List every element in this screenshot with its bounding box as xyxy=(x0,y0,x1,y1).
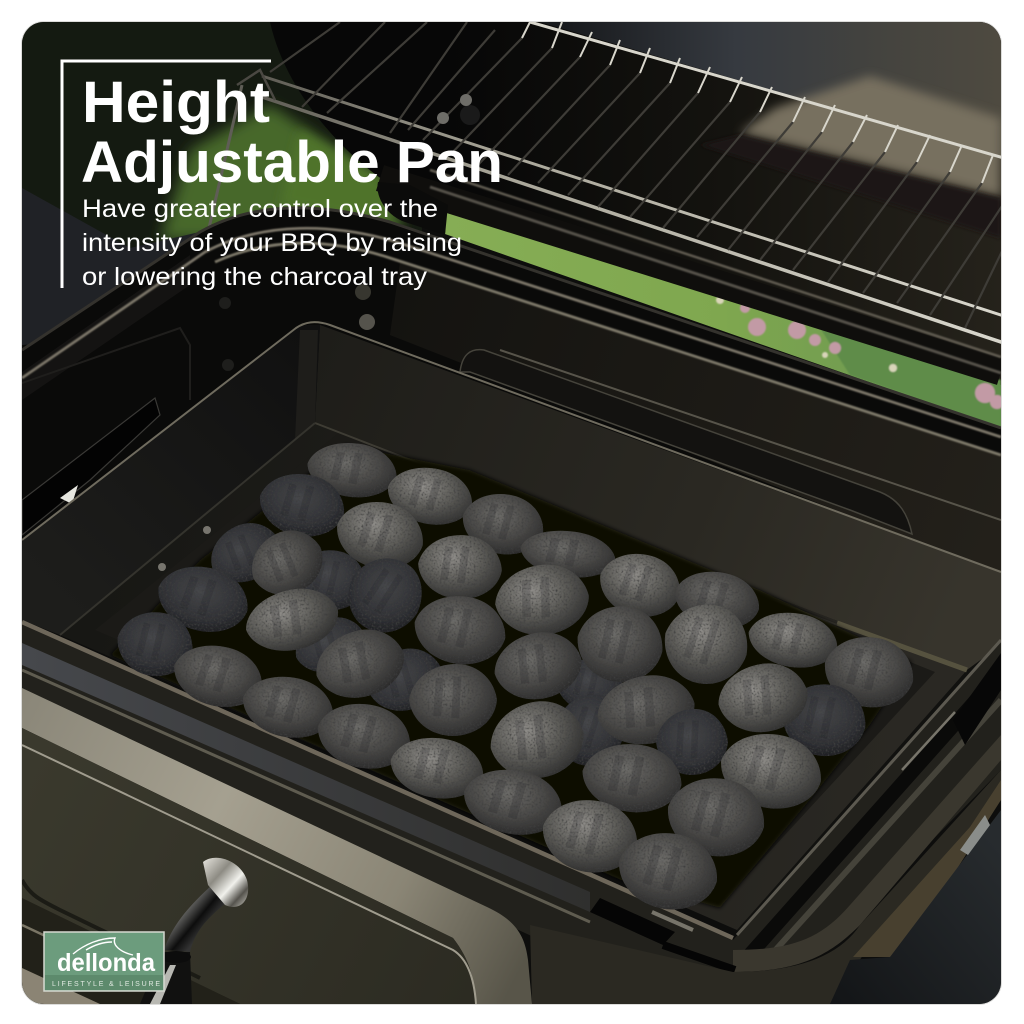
briquette shadow xyxy=(110,445,912,908)
description xyxy=(82,195,462,291)
charcoal briquettes xyxy=(112,437,920,919)
lid hinge tubes xyxy=(380,170,1001,373)
slot handle on back wall xyxy=(460,350,912,534)
grill body front xyxy=(22,620,1001,972)
vent knob xyxy=(140,858,248,1004)
brand logo: LIFESTYLE & LEISURE xyxy=(52,981,160,988)
lid bolts xyxy=(437,94,480,125)
lawn and flowers xyxy=(445,200,1004,428)
lower body and ground xyxy=(22,770,1001,1004)
right rim tubes xyxy=(737,640,1001,935)
brand logo xyxy=(44,932,164,991)
charcoal pan xyxy=(22,322,1001,950)
description: intensity of your BBQ by raising xyxy=(82,229,462,257)
pan floor xyxy=(60,423,967,930)
right slot xyxy=(958,653,1001,745)
lit lid top xyxy=(740,76,1001,197)
bright front band xyxy=(22,688,532,1004)
description: or lowering the charcoal tray xyxy=(82,263,428,291)
front panel xyxy=(22,728,476,1004)
hopper rear wall xyxy=(34,209,422,344)
lid interior xyxy=(270,22,1001,390)
description: Have greater control over the xyxy=(82,195,438,223)
pan walls xyxy=(315,325,1001,670)
scene behind the grate xyxy=(540,22,1001,157)
heading frame xyxy=(62,61,271,288)
back rim tubes xyxy=(22,208,1001,520)
title xyxy=(81,70,503,195)
side vent handle xyxy=(22,398,160,535)
hinge pillar xyxy=(377,182,448,235)
front lip tube xyxy=(22,622,733,938)
garden background xyxy=(22,22,422,345)
blue grey band xyxy=(22,643,590,912)
bolts on hopper xyxy=(219,284,375,371)
title: Adjustable Pan xyxy=(81,130,503,195)
pan catch xyxy=(590,898,675,945)
cooking grate xyxy=(197,22,1004,343)
pan rim highlights xyxy=(22,322,1001,572)
title: Height xyxy=(82,70,270,135)
brand logo: dellonda xyxy=(57,949,156,977)
logo wave xyxy=(73,938,133,955)
